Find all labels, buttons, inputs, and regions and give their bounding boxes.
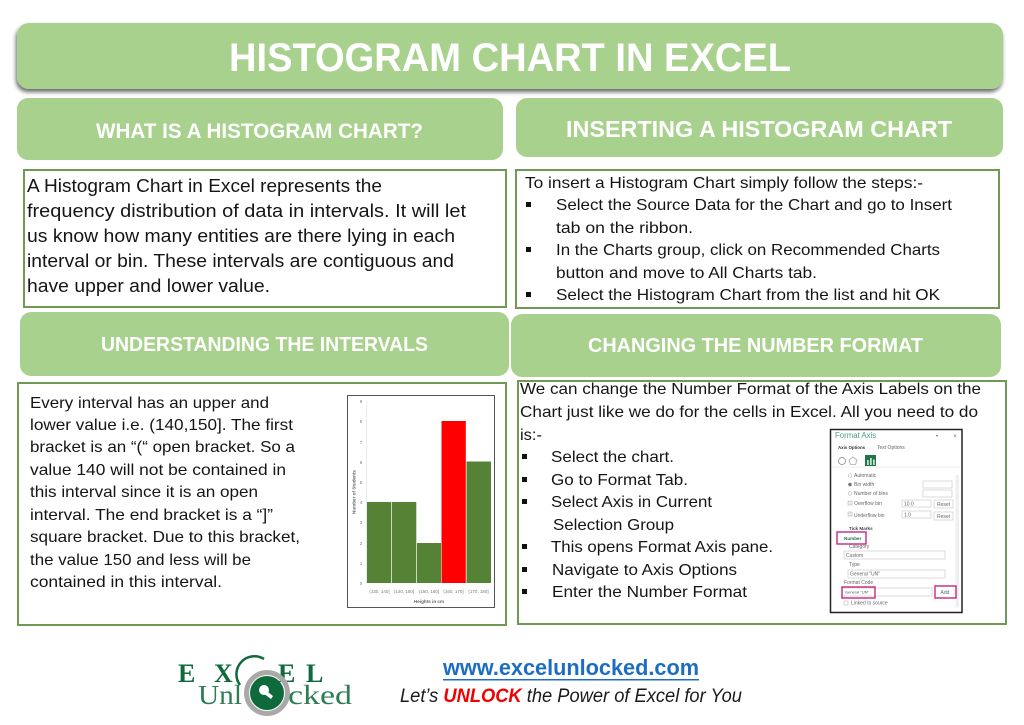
- y axis ticks: 1: [360, 561, 363, 566]
- intervals explanation text: lower value i.e. (140,150]. The first: [30, 417, 294, 434]
- panel: insertion steps: To insert a Histogram Chart simply follow the steps:-: [525, 175, 923, 192]
- tagline: Let’s UNLOCK the Power of Excel for You: [400, 686, 742, 707]
- panel: definition text: A Histogram Chart in Excel represents the: [27, 175, 382, 196]
- x axis labels: (130, 140]: [369, 589, 390, 594]
- number format text and steps: Select the chart.: [551, 449, 674, 466]
- panel heading: what is a histogram chart: [17, 98, 503, 160]
- format axis pane screenshot: Axis Options: [838, 445, 866, 450]
- format axis pane screenshot: Add: [941, 590, 950, 596]
- format axis pane screenshot: Category: [849, 544, 870, 550]
- format axis pane screenshot: Number: [844, 536, 862, 541]
- panel: insertion steps: Select the Histogram Chart from the list and hit OK: [556, 287, 940, 304]
- website link: www.excelunlocked.com: [442, 655, 699, 680]
- x axis labels: (160, 170]: [443, 589, 464, 594]
- number format text and steps: is:-: [520, 427, 542, 444]
- intervals explanation text: the value 150 and less will be: [30, 552, 251, 569]
- y axis ticks: [360, 399, 363, 586]
- number format text and steps: Go to Format Tab.: [551, 472, 688, 489]
- y axis ticks: 5: [360, 480, 363, 485]
- panel: insertion steps: button and move to All Charts tab.: [556, 265, 817, 282]
- intervals explanation text: value 140 will not be contained in: [30, 462, 286, 479]
- logo C shackle arc: [236, 656, 264, 685]
- format axis pane screenshot: ▾: [936, 433, 938, 438]
- logo wordmark: L: [306, 659, 323, 688]
- intervals explanation text: Every interval has an upper and: [30, 395, 269, 412]
- y axis ticks: 7: [360, 440, 363, 445]
- number format text and steps: Chart just like we do for the cells in Excel. All you need to do: [520, 404, 978, 421]
- format axis pane screenshot: General "UN": [845, 590, 870, 594]
- format axis pane screenshot: Reset: [937, 514, 951, 520]
- title banner: [17, 23, 1003, 89]
- y axis ticks: 8: [360, 419, 363, 424]
- y axis ticks: 3: [360, 520, 363, 525]
- panel: definition text: have upper and lower value.: [27, 275, 270, 296]
- panel heading: inserting a histogram chart: INSERTING A HISTOGRAM CHART: [566, 116, 952, 142]
- number format text and steps: Select Axis in Current: [551, 494, 713, 511]
- logo wordmark: X: [214, 659, 233, 688]
- panel heading: understanding the intervals: UNDERSTANDING THE INTERVALS: [101, 334, 428, 356]
- logo wordmark: E: [278, 659, 295, 688]
- format axis pane screenshot: Number of bins: [854, 491, 888, 497]
- panel: definition text: interval or bin. These intervals are contiguous and: [27, 250, 454, 271]
- panel: understanding the intervals body: [18, 383, 506, 625]
- panel: definition text: frequency distribution of data in intervals. It will let: [27, 200, 466, 221]
- intervals explanation text: this interval since it is an open: [30, 484, 258, 501]
- number format text and steps: [520, 381, 981, 601]
- panel: changing the number format body: [518, 381, 1006, 624]
- x axis labels: (150, 160]: [419, 589, 439, 594]
- format axis pane screenshot: Overflow bin: [854, 501, 882, 507]
- panel: insertion steps: tab on the ribbon.: [556, 220, 693, 237]
- panel heading: what is a histogram chart: WHAT IS A HISTOGRAM CHART?: [96, 120, 423, 143]
- x axis title: Heights in cm: [414, 599, 444, 604]
- intervals explanation text: square bracket. Due to this bracket,: [30, 529, 300, 546]
- number format text and steps: Navigate to Axis Options: [552, 562, 737, 579]
- format axis pane screenshot: Tick Marks: [849, 526, 873, 531]
- format axis pane screenshot: Type: [849, 562, 860, 568]
- intervals explanation text: contained in this interval.: [30, 574, 222, 591]
- panel: definition text: [24, 170, 506, 307]
- logo wordmark: E: [178, 659, 195, 688]
- x axis labels: (140, 150]: [394, 589, 414, 594]
- x axis labels: (170, 180]: [468, 589, 489, 594]
- format axis pane screenshot: Automatic: [854, 473, 877, 479]
- format axis pane screenshot: Underflow bin: [854, 513, 885, 519]
- format axis pane screenshot: Format Axis: [835, 431, 876, 440]
- panel heading: changing the number format: CHANGING THE NUMBER FORMAT: [588, 335, 923, 357]
- y axis title: Number of Students: [352, 470, 356, 514]
- number format text and steps: We can change the Number Format of the Axis Labels on the: [520, 381, 981, 398]
- pink highlight boxes: [837, 532, 956, 598]
- format axis pane screenshot: Linked to source: [851, 600, 888, 606]
- format axis pane screenshot: 10.0: [904, 502, 914, 508]
- y axis ticks: 6: [360, 460, 363, 465]
- number format text and steps: Selection Group: [553, 517, 674, 534]
- number format text and steps: This opens Format Axis pane.: [551, 539, 773, 556]
- title text: HISTOGRAM CHART IN EXCEL: [229, 36, 791, 80]
- panel: definition text: us know how many entities are there lying in each: [27, 225, 455, 246]
- format axis pane screenshot: 1.0: [904, 512, 911, 518]
- format axis pane screenshot: Custom: [846, 553, 863, 559]
- logo padlock: [246, 672, 288, 714]
- x axis labels: [369, 589, 489, 594]
- intervals explanation text: interval. The end bracket is a “]”: [30, 507, 273, 524]
- panel: insertion steps: [516, 170, 999, 308]
- panel heading: changing the number format: [511, 314, 1001, 377]
- logo wordmark: cked: [288, 680, 353, 710]
- panel heading: understanding the intervals: [20, 312, 509, 376]
- histogram chart: [348, 396, 494, 608]
- y axis ticks: 4: [360, 500, 363, 505]
- intervals explanation text: [30, 395, 300, 591]
- logo wordmark: Unl: [198, 680, 242, 710]
- intervals explanation text: bracket is an “(“ open bracket. So a: [30, 439, 295, 456]
- format axis pane screenshot: ×: [953, 434, 957, 440]
- format axis pane screenshot: Format Code: [844, 580, 873, 586]
- format axis pane screenshot: General "UN": [850, 572, 880, 578]
- pane icons: [838, 455, 876, 466]
- format axis pane screenshot: Bin width: [854, 482, 875, 488]
- histogram bars: [367, 421, 491, 583]
- format axis pane screenshot: Reset: [937, 502, 951, 508]
- logo wordmark: [178, 659, 353, 710]
- y axis ticks: 9: [360, 399, 363, 404]
- panel heading: inserting a histogram chart: [516, 98, 1003, 157]
- panel: insertion steps: Select the Source Data for the Chart and go to Insert: [556, 197, 953, 214]
- y axis ticks: 2: [360, 541, 363, 546]
- format axis pane screenshot: [830, 430, 962, 612]
- panel: insertion steps: In the Charts group, click on Recommended Charts: [556, 242, 940, 259]
- y axis ticks: 0: [360, 581, 363, 586]
- number format text and steps: Enter the Number Format: [552, 584, 748, 601]
- logo: Excel Unlocked: [178, 656, 353, 714]
- format axis pane screenshot: Text Options: [877, 445, 905, 451]
